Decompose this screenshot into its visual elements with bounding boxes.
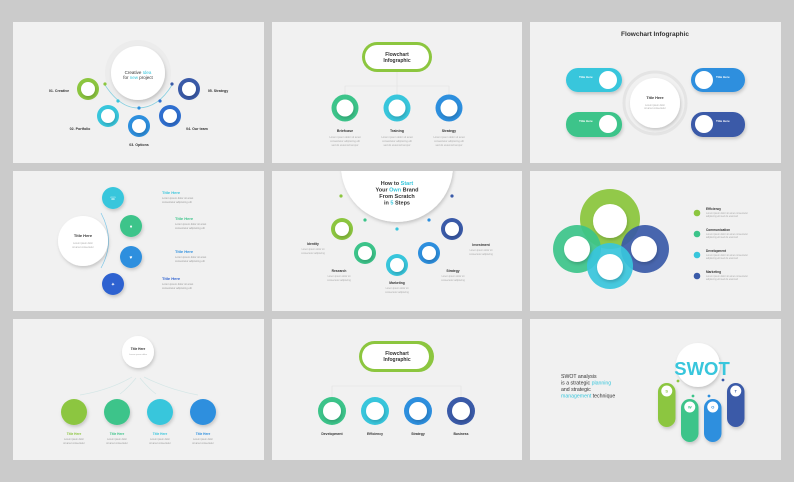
titles: consectetur adipiscing elit xyxy=(175,226,205,230)
text block xyxy=(561,374,615,400)
circles xyxy=(61,399,216,425)
title pill: Flowchart xyxy=(385,52,409,58)
labels: consectetur adipiscing elit xyxy=(330,139,360,143)
labels: Lorem ipsum dolor xyxy=(107,438,127,441)
big title circle: in 5 Steps xyxy=(384,200,410,206)
labels: Lorem ipsum dolor sit xyxy=(442,275,465,278)
slide 4: vertical bubbles xyxy=(13,171,264,311)
checklist xyxy=(694,207,748,281)
pills: T xyxy=(735,388,738,394)
labels: consectetur adipiscing xyxy=(441,279,465,282)
top circle: Title Here xyxy=(131,347,145,351)
labels: Lorem ipsum dolor sit amet xyxy=(329,135,361,139)
checklist: Communication xyxy=(706,228,730,232)
central circle xyxy=(105,40,171,106)
labels: sit amet consectetur xyxy=(192,442,214,445)
pills: Title Here xyxy=(579,119,593,123)
labels: sed do eiusmod tempor xyxy=(331,143,359,147)
checklist: Lorem ipsum dolor sit amet consectetur xyxy=(706,275,748,278)
checklist: Development xyxy=(706,249,727,253)
center circle: sit amet consectetur xyxy=(72,246,94,249)
bubbles: ♦ xyxy=(130,224,133,230)
center circle: Title Here xyxy=(74,233,93,238)
step labels: 01. Creative xyxy=(49,89,69,93)
center circle xyxy=(624,72,686,134)
center circle: Title Here xyxy=(646,96,664,100)
checklist: Efficiency xyxy=(706,207,721,211)
labels: Strategy xyxy=(446,269,460,273)
pills: Title Here xyxy=(716,119,730,123)
labels: Lorem ipsum dolor xyxy=(64,438,84,441)
text block: SWOT analysis xyxy=(561,374,597,380)
big title circle: From Scratch xyxy=(379,194,415,200)
text block: is a strategic planning xyxy=(561,380,611,386)
slide 2: flowchart 3 circles xyxy=(272,22,522,163)
title pill: Infographic xyxy=(383,357,411,363)
labels: Research xyxy=(332,269,346,273)
titles: Lorem ipsum dolor sit amet xyxy=(175,222,207,226)
pills: S xyxy=(665,388,668,394)
checklist: adipiscing elit sed do eiusmod xyxy=(706,215,739,218)
checklist: Marketing xyxy=(706,270,721,274)
labels: Investment xyxy=(472,243,491,247)
bubbles xyxy=(102,187,142,295)
titles: Title Here xyxy=(162,190,181,195)
titles: Title Here xyxy=(175,249,194,254)
step circles xyxy=(77,78,200,137)
titles: consectetur adipiscing elit xyxy=(162,286,192,290)
labels: Efficiency xyxy=(367,432,383,436)
titles: Lorem ipsum dolor sit amet xyxy=(162,196,194,200)
pills xyxy=(658,379,744,442)
slide 6: overlapping circles xyxy=(530,171,781,311)
labels: sit amet consectetur xyxy=(106,442,128,445)
labels: sit amet consectetur xyxy=(63,442,85,445)
bubbles: ✦ xyxy=(111,282,115,288)
checklist: Lorem ipsum dolor sit amet consectetur xyxy=(706,233,748,236)
dots xyxy=(339,194,454,231)
labels: Lorem ipsum dolor sit xyxy=(470,249,493,252)
SWOT heading: SWOT xyxy=(674,358,730,379)
SWOT heading xyxy=(674,343,730,387)
slide 9: SWOT xyxy=(530,319,781,460)
slide 5: 5 steps brand xyxy=(272,171,522,311)
labels: consectetur adipiscing xyxy=(327,279,351,282)
labels: Lorem ipsum dolor sit xyxy=(328,275,351,278)
big title circle: How to Start xyxy=(381,181,413,187)
labels xyxy=(301,242,493,294)
slide 1: creative idea xyxy=(13,22,264,163)
titles: consectetur adipiscing elit xyxy=(162,200,192,204)
labels: Lorem ipsum dolor sit amet xyxy=(381,135,413,139)
pills: Title Here xyxy=(716,75,730,79)
step labels xyxy=(49,89,228,147)
step labels: 03. Options xyxy=(129,143,149,147)
title pill: Infographic xyxy=(383,58,411,64)
connecting arc xyxy=(105,85,172,108)
labels: consectetur adipiscing xyxy=(385,291,409,294)
labels: Marketing xyxy=(389,281,405,285)
labels: consectetur adipiscing elit xyxy=(382,139,412,143)
titles: consectetur adipiscing elit xyxy=(175,259,205,263)
labels xyxy=(321,432,469,436)
checklist: adipiscing elit sed do eiusmod xyxy=(706,278,739,281)
labels: Title Here xyxy=(196,432,210,436)
title pill: Flowchart xyxy=(385,351,409,357)
labels xyxy=(329,129,465,147)
text block: and strategic xyxy=(561,387,591,393)
labels: Title Here xyxy=(110,432,124,436)
bubbles: ♥ xyxy=(130,255,133,261)
step labels: 04. Our team xyxy=(186,127,208,131)
title pill xyxy=(362,42,432,72)
labels: consectetur adipiscing xyxy=(301,252,325,255)
labels: Lorem ipsum dolor sit amet xyxy=(433,135,465,139)
center circle xyxy=(58,216,108,266)
labels: sed do eiusmod tempor xyxy=(383,143,411,147)
labels: consectetur adipiscing xyxy=(469,253,493,256)
pills: O xyxy=(711,404,714,410)
labels: Identity xyxy=(307,242,319,246)
top circle xyxy=(122,336,154,368)
titles: Title Here xyxy=(175,216,194,221)
central circle: Creative Idea xyxy=(125,70,152,75)
big title circle: Your Own Brand xyxy=(376,188,418,194)
labels: Strategy xyxy=(442,129,456,133)
checklist: adipiscing elit sed do eiusmod xyxy=(706,236,739,239)
labels: Title Here xyxy=(153,432,167,436)
labels: Lorem ipsum dolor xyxy=(150,438,170,441)
big title circle xyxy=(340,171,456,226)
labels: Briefcase xyxy=(337,129,353,133)
labels: Title Here xyxy=(67,432,81,436)
slide 8: flowchart 4 circles xyxy=(272,319,522,460)
pills xyxy=(566,68,745,137)
labels: Lorem ipsum dolor sit xyxy=(386,287,409,290)
circle cluster xyxy=(553,189,669,289)
labels: Business xyxy=(453,432,469,436)
labels: sed do eiusmod tempor xyxy=(435,143,463,147)
labels: Development xyxy=(321,432,344,436)
checklist: adipiscing elit sed do eiusmod xyxy=(706,257,739,260)
bubbles: ☏ xyxy=(110,196,116,202)
step labels: 05. Strategy xyxy=(208,89,228,93)
three circles xyxy=(332,94,462,122)
pills: Title Here xyxy=(579,75,593,79)
labels: consectetur adipiscing elit xyxy=(434,139,464,143)
labels xyxy=(63,432,214,445)
step circles xyxy=(331,218,463,276)
titles: Lorem ipsum dolor sit amet xyxy=(175,255,207,259)
text block: management technique xyxy=(561,394,615,400)
center circle: sit amet consectetur xyxy=(644,107,666,110)
slide 3: flowchart pills xyxy=(530,22,781,163)
step labels: 02. Portfolio xyxy=(70,127,91,131)
title pill xyxy=(359,341,434,372)
checklist: Lorem ipsum dolor sit amet consectetur xyxy=(706,212,748,215)
labels: Lorem ipsum dolor xyxy=(193,438,213,441)
titles: Lorem ipsum dolor sit amet xyxy=(162,282,194,286)
titles: Title Here xyxy=(162,276,181,281)
labels: Strategy xyxy=(411,432,425,436)
labels: Training xyxy=(390,129,404,133)
center circle: Lorem ipsum dolor xyxy=(73,242,93,245)
top circle: Lorem ipsum dolor xyxy=(129,353,147,356)
pills: W xyxy=(688,404,692,410)
circles xyxy=(318,397,475,425)
title: Flowchart Infographic xyxy=(621,31,689,38)
central circle: for new project xyxy=(123,75,154,80)
titles xyxy=(162,190,207,290)
center circle: Lorem ipsum dolor xyxy=(645,104,665,107)
checklist: Lorem ipsum dolor sit amet consectetur xyxy=(706,254,748,257)
labels: Lorem ipsum dolor sit xyxy=(302,248,325,251)
slide 7: tree 4 circles xyxy=(13,319,264,460)
labels: sit amet consectetur xyxy=(149,442,171,445)
